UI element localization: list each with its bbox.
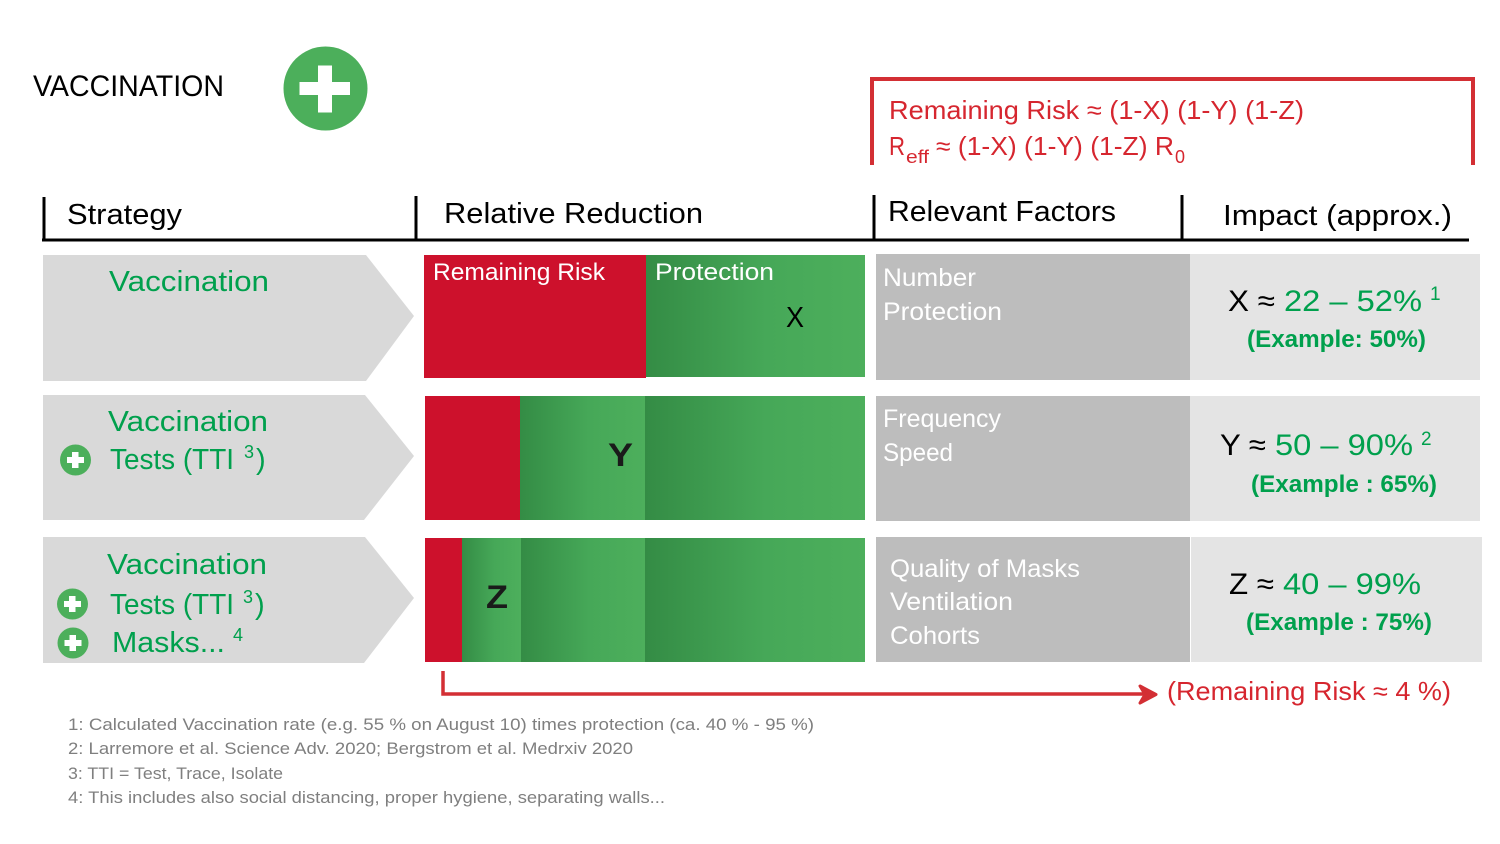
- bar row 1: [424, 255, 865, 378]
- arrow: remaining risk: [443, 671, 1156, 703]
- factors row 3: [876, 537, 1190, 662]
- icon: large plus: [284, 46, 368, 130]
- formula box: R: [889, 131, 905, 161]
- impact row 1: 1: [1430, 284, 1441, 305]
- strategy row 2: 3: [244, 442, 254, 462]
- bar row 1: X: [786, 302, 804, 334]
- strategy row 2: Vaccination: [108, 406, 268, 438]
- impact row 1: 22 – 52%: [1284, 285, 1422, 318]
- title: VACCINATION: [33, 70, 224, 103]
- factors row 2: Speed: [883, 439, 953, 467]
- footnotes: [68, 715, 814, 807]
- impact row 2: 2: [1421, 429, 1432, 450]
- strategy row 3: 3: [243, 587, 253, 607]
- strategy row 1: Vaccination: [109, 266, 269, 298]
- impact row 2: 50 – 90%: [1275, 429, 1413, 462]
- formula box: ≈ (1-X) (1-Y) (1-Z) R: [936, 131, 1174, 161]
- table header: Impact (approx.): [1223, 200, 1452, 232]
- factors row 3: Ventilation: [890, 588, 1013, 616]
- impact row 2: [1190, 396, 1480, 521]
- strategy row 3: 4: [233, 625, 243, 645]
- footnotes: 2: Larremore et al. Science Adv. 2020; Bergstrom et al. Medrxiv 2020: [68, 739, 633, 758]
- bar row 1: Protection: [655, 259, 774, 286]
- bar row 2: Y: [608, 437, 633, 473]
- formula box: [872, 79, 1473, 167]
- impact row 3: [1191, 537, 1482, 662]
- impact row 3: Z ≈: [1229, 568, 1274, 601]
- strategy row 3: Vaccination: [107, 549, 267, 581]
- impact row 3: 40 – 99%: [1283, 568, 1421, 601]
- bar row 3: Z: [486, 579, 508, 615]
- icon: plus: [57, 588, 88, 620]
- factors row 3: Quality of Masks: [890, 555, 1080, 583]
- impact row 2: Y ≈: [1220, 429, 1266, 462]
- factors row 1: Protection: [883, 298, 1002, 326]
- factors row 3: Cohorts: [890, 622, 980, 650]
- footnotes: 3: TTI = Test, Trace, Isolate: [68, 764, 283, 783]
- strategy row 3: ): [255, 589, 265, 621]
- strategy row 3: Tests (TTI: [110, 589, 234, 621]
- impact row 2: (Example : 65%): [1251, 471, 1437, 498]
- impact row 1: (Example: 50%): [1247, 326, 1426, 353]
- strategy row 2: [43, 395, 414, 520]
- impact row 1: X ≈: [1228, 285, 1275, 318]
- icon: plus: [58, 628, 88, 658]
- strategy row 3: [43, 537, 414, 663]
- strategy row 2: ): [256, 444, 266, 476]
- table header: Relevant Factors: [888, 196, 1116, 228]
- bar row 3: [425, 538, 865, 662]
- icon: plus: [60, 444, 91, 476]
- impact row 3: (Example : 75%): [1246, 609, 1432, 636]
- table header: Relative Reduction: [444, 198, 703, 230]
- factors row 1: [876, 254, 1190, 380]
- table header: [42, 195, 1469, 240]
- strategy row 2: Tests (TTI: [110, 444, 234, 476]
- bar row 1: Remaining Risk: [433, 259, 606, 286]
- formula box: 0: [1175, 147, 1185, 167]
- remaining risk label: (Remaining Risk ≈ 4 %): [1167, 676, 1451, 706]
- footnotes: 4: This includes also social distancing, proper hygiene, separating walls...: [68, 788, 665, 807]
- formula box: eff: [906, 147, 930, 167]
- factors row 1: Number: [883, 264, 976, 292]
- footnotes: 1: Calculated Vaccination rate (e.g. 55 % on August 10) times protection (ca. 40 % - 95 %): [68, 715, 814, 734]
- strategy row 3: Masks...: [112, 627, 225, 659]
- bar row 2: [425, 396, 865, 520]
- strategy row 1: [43, 255, 414, 381]
- formula box: Remaining Risk ≈ (1-X) (1-Y) (1-Z): [889, 95, 1304, 125]
- table header: Strategy: [67, 199, 183, 231]
- factors row 2: [876, 396, 1190, 521]
- impact row 1: [1190, 254, 1480, 380]
- factors row 2: Frequency: [883, 405, 1001, 433]
